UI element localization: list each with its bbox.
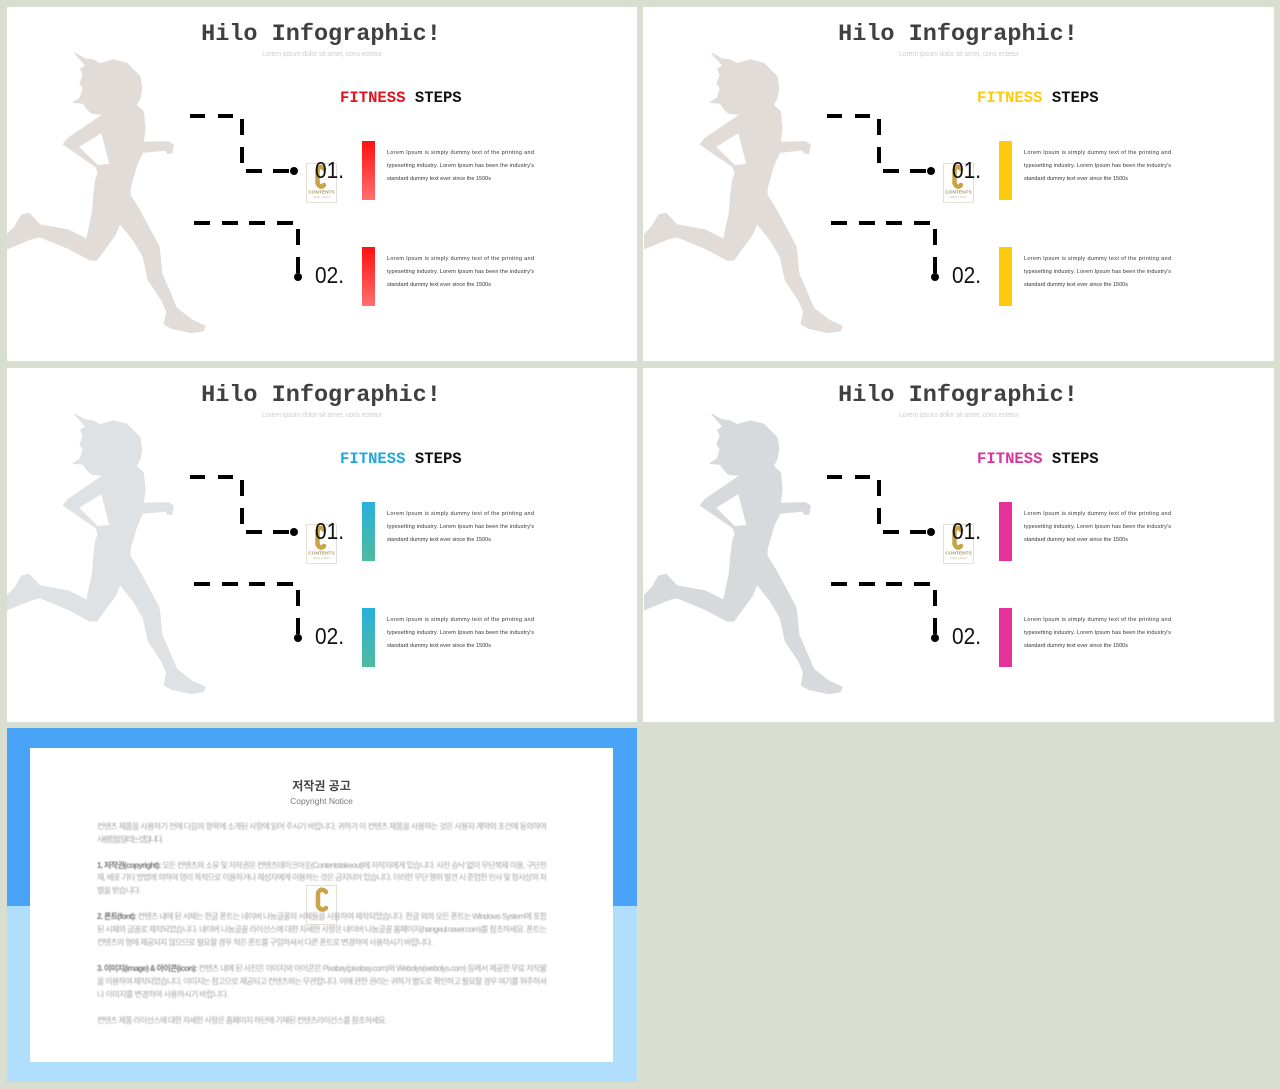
paragraph 2 font [97, 911, 548, 947]
color bar 01 [999, 141, 1012, 200]
text block 01: standard dummy text ever since the 1500s [1024, 537, 1128, 543]
paragraph 1 copyright [97, 860, 547, 895]
runner silhouette [644, 53, 842, 333]
color bar 02 [999, 608, 1012, 667]
panel: blue fitness steps [7, 368, 637, 722]
subtitle: Lorem ipsum dolor sit amet, cons ectetur [262, 412, 383, 419]
paragraph 2 font: 컨텐츠의 형에 제공되지 않으므로 필요할 경우 적은 폰트를 구입하셔서 다른 폰트로 변경하여 사용하시기 바랍니다. [97, 937, 433, 947]
text block 02: Lorem Ipsum is simply dummy text of the printing and [1024, 256, 1171, 262]
text block 02 [387, 256, 534, 288]
watermark logo [306, 524, 336, 564]
dashed connector 01 [190, 116, 298, 175]
paragraph 3 image and icon [97, 963, 547, 999]
title: Hilo Infographic! [838, 21, 1078, 48]
watermark logo: MAIL LOGO [313, 195, 330, 199]
number 02: 02. [952, 623, 981, 649]
number 01: 01. [315, 157, 344, 183]
text block 01 [1024, 511, 1171, 543]
dashed connector 01 [827, 116, 935, 175]
panel: red fitness steps [7, 7, 637, 361]
text block 02: Lorem Ipsum is simply dummy text of the printing and [1024, 617, 1171, 623]
intro paragraph [97, 821, 547, 844]
text block 02: Lorem Ipsum is simply dummy text of the printing and [387, 256, 534, 262]
text block 01 [387, 150, 534, 182]
runner silhouette [7, 414, 205, 694]
text block 01: typesetting industry. Lorem Ipsum has been the industry's [387, 163, 534, 169]
text block 02: standard dummy text ever since the 1500s [387, 282, 491, 288]
paragraph 2 font: 된 시체의 글꼴로 제작되었습니다. 네이버 나눔글꼴 라이선스에 대한 자세한 사항은 네이버 나눔글꼴 홈페이지(hangeul.naver.com)를 참조하세요. 폰트는 [97, 924, 547, 934]
text block 02: standard dummy text ever since the 1500s [387, 643, 491, 649]
text block 01: typesetting industry. Lorem Ipsum has been the industry's [1024, 524, 1171, 530]
watermark logo [944, 164, 974, 202]
watermark logo [306, 164, 336, 202]
title: Hilo Infographic! [201, 382, 441, 409]
notice subtitle: Copyright Notice [290, 796, 353, 806]
color bar 01 [999, 502, 1012, 561]
watermark logo: CONTENTS [945, 550, 972, 556]
text block 02: standard dummy text ever since the 1500s [1024, 282, 1128, 288]
text block 01: standard dummy text ever since the 1500s [387, 537, 491, 543]
dashed connector 02 [831, 223, 939, 281]
heading: FITNESS STEPS [340, 89, 462, 107]
dashed connector 02 [194, 584, 302, 642]
text block 02: typesetting industry. Lorem Ipsum has been the industry's [387, 630, 534, 636]
color bar 02 [362, 608, 375, 667]
light blue background bottom [7, 906, 637, 1082]
title: Hilo Infographic! [838, 382, 1078, 409]
paragraph 1 copyright: 벌을 받습니다. [97, 885, 141, 895]
text block 01: Lorem Ipsum is simply dummy text of the printing and [387, 150, 534, 156]
intro paragraph: 사용함을 알리는 것입니다. [97, 834, 163, 844]
notice title: 저작권 공고 [292, 778, 351, 793]
number 02: 02. [952, 262, 981, 288]
dashed connector 01 [190, 477, 298, 536]
text block 01: Lorem Ipsum is simply dummy text of the printing and [387, 511, 534, 517]
number 02: 02. [315, 623, 344, 649]
watermark logo [944, 524, 974, 564]
color bar 01 [362, 141, 375, 200]
dashed connector 02 [831, 584, 939, 642]
watermark logo [306, 886, 336, 924]
watermark logo: MAIL LOGO [313, 556, 330, 560]
closing paragraph: 컨텐츠 제품 라이선스에 대한 자세한 사항은 홈페이지 하단에 기재된 컨텐츠라이선스를 참조하세요. [97, 1015, 387, 1025]
text block 01: Lorem Ipsum is simply dummy text of the printing and [1024, 511, 1171, 517]
watermark logo: CONTENTS [945, 190, 972, 196]
text block 02: typesetting industry. Lorem Ipsum has been the industry's [1024, 269, 1171, 275]
text block 01: typesetting industry. Lorem Ipsum has been the industry's [1024, 163, 1171, 169]
runner silhouette [7, 53, 205, 333]
paragraph 3 image and icon: 을 이용하여 제작되었습니다. 이미지는 참고으로 제공되고 컨텐츠와는 무관합니다. 이에 관한 권리는 귀하가 별도로 확인하고 필요할 경우 여기를 위주하셔 [97, 976, 547, 986]
text block 02 [1024, 617, 1171, 649]
paragraph 3 image and icon: 3. 이미지(image) & 아이콘(icon): 컨텐츠 내에 된 사진은 이미지와 아이콘은 Pixabay(pixabay.com)와 Webolys(webolys.com) 등에서 제공한 무료 저작물 [97, 963, 547, 973]
color bar 02 [362, 247, 375, 306]
subtitle: Lorem ipsum dolor sit amet, cons ectetur [899, 51, 1020, 58]
number 01: 01. [952, 518, 981, 544]
paragraph 1 copyright: 1. 저작권(copyright): 모든 컨텐츠의 소유 및 저작권은 컨텐츠테이크아웃(Contentstakeout)에 저작자에게 있습니다. 사전 승낙 없이 무단복제 이용, 구단전 [97, 860, 547, 870]
intro paragraph: 컨텐츠 제품을 사용하기 전에 다음의 항목에 소개된 사항에 읽어 주시기 바랍니다. 귀하가 이 컨텐츠 제품을 사용하는 것은 사용자 계약의 조건에 동의하여 [97, 821, 547, 831]
heading: FITNESS STEPS [977, 89, 1099, 107]
color bar 02 [999, 247, 1012, 306]
panel: yellow fitness steps [643, 7, 1274, 361]
subtitle: Lorem ipsum dolor sit amet, cons ectetur [262, 51, 383, 58]
heading: FITNESS STEPS [340, 450, 462, 468]
text block 02: standard dummy text ever since the 1500s [1024, 643, 1128, 649]
subtitle: Lorem ipsum dolor sit amet, cons ectetur [899, 412, 1020, 419]
panel: copyright notice [7, 728, 637, 1082]
text block 02: typesetting industry. Lorem Ipsum has been the industry's [387, 269, 534, 275]
text block 02: typesetting industry. Lorem Ipsum has been the industry's [1024, 630, 1171, 636]
paragraph 2 font: 2. 폰트(font): 컨텐츠 내에 된 서체는 한글 폰트는 네이버 나눔글꼴의 서체들을 사용하여 제작되었습니다. 한글 외의 모든 폰트는 Windows System에 포함 [97, 911, 548, 921]
number 02: 02. [315, 262, 344, 288]
text block 01: standard dummy text ever since the 1500s [1024, 176, 1128, 182]
dashed connector 01 [827, 477, 935, 536]
runner silhouette [644, 414, 842, 694]
watermark logo: CONTENTS [308, 550, 335, 556]
panel: pink fitness steps [643, 368, 1274, 722]
text block 02 [1024, 256, 1171, 288]
blue background top [7, 728, 637, 906]
number 01: 01. [952, 157, 981, 183]
heading: FITNESS STEPS [977, 450, 1099, 468]
white notice sheet [30, 748, 613, 1062]
watermark logo: MAIL LOGO [950, 556, 967, 560]
text block 01: Lorem Ipsum is simply dummy text of the printing and [1024, 150, 1171, 156]
watermark logo: CONTENTS [308, 190, 335, 196]
watermark logo: MAIL LOGO [950, 195, 967, 199]
text block 02: Lorem Ipsum is simply dummy text of the printing and [387, 617, 534, 623]
text block 02 [387, 617, 534, 649]
paragraph 3 image and icon: 나 이미지를 변경하여 사용하시기 바랍니다. [97, 989, 229, 999]
text block 01 [387, 511, 534, 543]
text block 01: typesetting industry. Lorem Ipsum has been the industry's [387, 524, 534, 530]
text block 01 [1024, 150, 1171, 182]
color bar 01 [362, 502, 375, 561]
text block 01: standard dummy text ever since the 1500s [387, 176, 491, 182]
title: Hilo Infographic! [201, 21, 441, 48]
dashed connector 02 [194, 223, 302, 281]
paragraph 1 copyright: 재, 배포 기타 방법에 의하여 영리 목적으로 이용하거나 제삼자에게 이용하는 것은 금지되어 있습니다. 이러한 무단 행위 발견 시 준엄한 민사 및 형사상의 처 [97, 872, 547, 882]
number 01: 01. [315, 518, 344, 544]
